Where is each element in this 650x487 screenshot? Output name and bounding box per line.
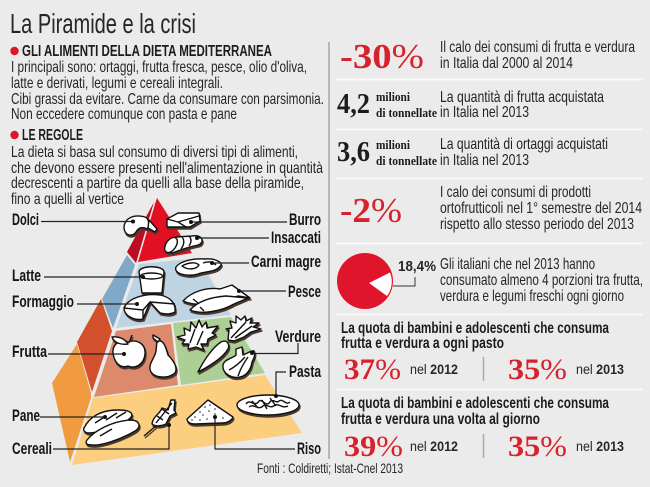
leader: insaccati (197, 237, 269, 239)
pyramid tier: base (52, 344, 302, 465)
leader: cereali (53, 425, 169, 449)
figure: 37% nel 2012 (344, 353, 458, 386)
stat: -2% (340, 184, 642, 233)
pyramid labels: Pane (12, 407, 40, 425)
paragraph: regole: decrescenti a partire da quelli alla base della piramide, (11, 175, 304, 192)
stat: 18,4% pie chart (337, 253, 643, 309)
text block: le regole (10, 127, 323, 208)
icon: pear (frutta) (150, 335, 176, 377)
pyramid labels: Pesce (288, 283, 321, 301)
icon: glass of milk (latte) (139, 267, 164, 293)
description: in Italia nel 2013 (440, 104, 529, 121)
figure: 39% nel 2012: 39% (344, 430, 403, 463)
figure: 37% nel 2012: 37% (344, 353, 401, 386)
figure: 37% nel 2012: nel 2012 (410, 361, 458, 377)
icon: rice (riso) (187, 400, 233, 424)
icon: fish (pesce) (183, 285, 250, 312)
description (440, 39, 635, 72)
paragraph: alimenti (11, 59, 324, 123)
icon: red bullet (10, 47, 19, 55)
figure: 4,2 (337, 89, 370, 120)
text block: gli alimenti della dieta mediterranea (10, 43, 324, 123)
pyramid tier: verdure (173, 317, 265, 385)
pyramid labels: Pasta (289, 363, 322, 381)
figure: -2% (340, 191, 402, 230)
icon: wheat (cereali) (144, 400, 176, 436)
description (440, 184, 642, 233)
description: I calo dei consumi di prodotti (440, 184, 591, 201)
icon: salami (insaccati) (162, 235, 202, 255)
stat: 3,6 milioni (337, 136, 608, 169)
figure: 35% nel 2013: nel 2013 (576, 438, 624, 454)
paragraph: alimenti: I principali sono: ortaggi, frutta fresca, pesce, olio d'oliva, (11, 59, 307, 76)
leader: pasta (276, 372, 286, 396)
heading: frutta e verdura a ogni pasto (341, 335, 504, 352)
pie chart (337, 253, 393, 309)
icon: red bullet (10, 131, 19, 139)
icon: herbs (verdure) (226, 316, 261, 341)
figure: 35% nel 2013 (508, 430, 624, 463)
leader: frutta (48, 353, 124, 355)
unit: di tonnellate (376, 105, 437, 120)
paragraph: regole: La dieta si basa sul consumo di diversi tipi di alimenti, (11, 144, 298, 161)
icon: carrot (verdure) (198, 341, 229, 372)
leader dots (103, 220, 278, 427)
source note: Fonti : Coldiretti; Istat-Cnel 2013 (257, 460, 403, 476)
leader: pesce (239, 290, 286, 292)
unit: milioni (376, 89, 410, 104)
leader: latte (44, 276, 143, 278)
leader: formaggio (77, 303, 137, 305)
unit (376, 89, 437, 120)
unit: di tonnellate (376, 153, 437, 168)
panel: frutta e verdura una volta al giorno (341, 395, 624, 463)
pyramid labels: Dolci (12, 211, 39, 229)
icon: cheese (formaggio) (124, 295, 175, 319)
paragraph: alimenti: Non eccedere comunque con pasta e pane (11, 106, 237, 123)
stat: 4,2 milioni (337, 89, 604, 121)
pyramid tier: dolci e grassi (127, 198, 192, 263)
panel: frutta e verdura a ogni pasto (341, 320, 624, 386)
pyramid labels: Formaggio (12, 293, 74, 311)
description: in Italia dal 2000 al 2014 (440, 55, 573, 72)
description (440, 89, 604, 121)
figure: 39% nel 2012: nel 2012 (410, 438, 458, 454)
figure: 35% nel 2013: 35% (508, 430, 567, 463)
unit: milioni (376, 137, 410, 152)
icon: lean meat (carni magre) (176, 259, 221, 275)
pyramid labels: Burro (289, 211, 321, 229)
description (440, 256, 643, 305)
pyramid labels: Riso (297, 440, 321, 458)
figure: 35% nel 2013 (508, 353, 624, 386)
leader: riso (215, 417, 295, 449)
pyramid tier: latticini e carni (102, 255, 231, 328)
heading: frutta e verdura una volta al giorno (341, 411, 540, 428)
description: in Italia nel 2013 (440, 152, 529, 169)
leader: dolci (41, 220, 133, 222)
pyramid labels: Cereali (12, 440, 52, 458)
leader: verdure (252, 343, 298, 354)
icon: bread (pane) (84, 410, 139, 445)
paragraph: regole: fino a quelli al vertice (11, 191, 124, 208)
pyramid labels (12, 211, 322, 458)
figure: 3,6 (337, 137, 370, 168)
pyramid labels: Insaccati (271, 229, 321, 247)
pyramid labels: Latte (12, 267, 41, 285)
unit (376, 137, 437, 168)
title: La Piramide e la crisi (10, 8, 196, 39)
icon: croissant (dolci) (124, 216, 157, 235)
description: Gli italiani che nel 2013 hanno (440, 256, 595, 273)
description: La quantità di frutta acquistata (440, 89, 604, 106)
stat: -30% (340, 37, 635, 76)
pyramid tier: frutta (77, 299, 178, 397)
paragraph: regole (11, 144, 323, 208)
pyramid labels: Frutta (12, 343, 48, 361)
callout line (393, 277, 415, 286)
figure: 35% nel 2013: nel 2013 (576, 361, 624, 377)
icon: butter (167, 213, 200, 227)
icon: garlic (verdure) (223, 347, 255, 377)
icon: apple (frutta) (112, 335, 145, 367)
paragraph: alimenti: latte e derivati, legumi e cereali integrali. (11, 75, 223, 92)
icon: lettuce (verdure) (177, 320, 218, 350)
leader: burro (190, 221, 287, 223)
figure: -30% (340, 37, 424, 76)
heading (341, 320, 609, 352)
leader: pane (40, 416, 105, 418)
pyramid labels: Verdure (275, 328, 321, 346)
heading: gli alimenti: GLI ALIMENTI DELLA DIETA MEDITERRANEA (22, 43, 272, 60)
heading (341, 395, 609, 428)
leader: carni magre (212, 262, 249, 264)
paragraph: regole: che devono essere presenti nell'alimentazione in quantità (11, 160, 323, 177)
figure: 18,4% (398, 259, 436, 275)
food pyramid (12, 198, 322, 465)
figure: 35% nel 2013: 35% (508, 353, 567, 386)
icon: pasta (pasta) (237, 395, 299, 415)
figure: 39% nel 2012 (344, 430, 458, 463)
heading: le regole: LE REGOLE (22, 127, 83, 144)
description (440, 136, 608, 169)
pyramid labels: Carni magre (251, 253, 321, 271)
paragraph: alimenti: Cibi grassi da evitare. Carne da consumare con parsimonia. (11, 91, 324, 108)
